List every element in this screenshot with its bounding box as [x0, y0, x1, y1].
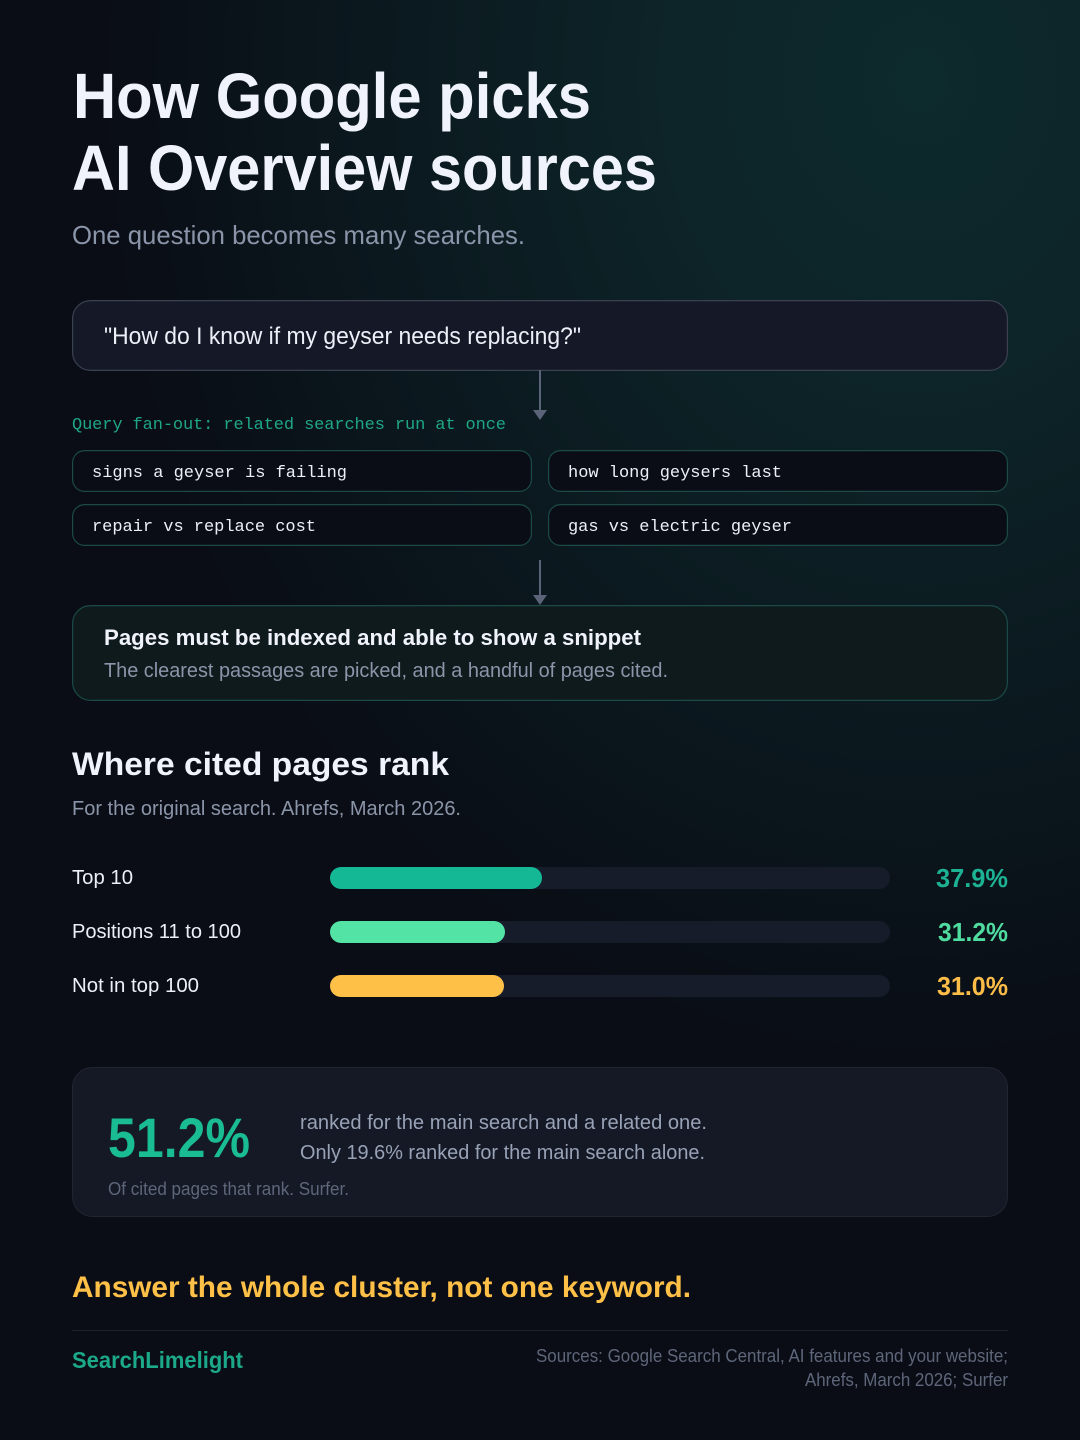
bar: positions 11 to 100: Positions 11 to 100: [72, 921, 241, 943]
stat source note: Of cited pages that rank. Surfer.: [108, 1179, 349, 1199]
panel: indexing requirement: The clearest passages are picked, and a handful of pages cited.: [104, 660, 668, 682]
section note: For the original search. Ahrefs, March 2026.: [72, 798, 461, 820]
chip: signs a geyser is failing: signs a geyser is failing: [92, 464, 347, 483]
arrow: question to fan-out: [533, 370, 547, 420]
chip: how long geysers last: [549, 451, 1007, 491]
bar: not in top 100: Not in top 100: [72, 975, 199, 997]
panel: fan-out queries: [73, 451, 1007, 545]
bar: positions 11 to 100: 31.2%: [938, 917, 1008, 947]
bar: top 10: Top 10: [72, 867, 133, 889]
bar chart: [72, 863, 1008, 1001]
sources: Sources: Google Search Central, AI features and your website;: [536, 1346, 1008, 1366]
subtitle: One question becomes many searches.: [72, 220, 525, 250]
brand: SearchLimelight: [72, 1347, 243, 1373]
sources: Ahrefs, March 2026; Surfer: [805, 1370, 1008, 1390]
bar: top 10: 37.9%: [936, 863, 1008, 893]
bar: positions 11 to 100: [72, 917, 1008, 947]
big number: 51.2%: [108, 1106, 250, 1169]
title: AI Overview sources: [72, 132, 657, 204]
title: How Google picks: [73, 60, 591, 132]
bar: not in top 100: 31.0%: [937, 971, 1008, 1001]
chip: repair vs replace cost: repair vs replace cost: [92, 518, 316, 537]
chip: repair vs replace cost: [73, 505, 531, 545]
stat explanation: ranked for the main search and a related one.: [300, 1112, 707, 1134]
stat explanation: [300, 1112, 707, 1164]
chip: gas vs electric geyser: [549, 505, 1007, 545]
bar: not in top 100: [72, 971, 1008, 1001]
arrow: fan-out to result: [533, 560, 547, 605]
fan-out label: Query fan-out: related searches run at once: [72, 416, 506, 435]
chip: gas vs electric geyser: gas vs electric geyser: [568, 518, 792, 537]
takeaway: Answer the whole cluster, not one keyword.: [72, 1271, 691, 1304]
bar: top 10: [72, 863, 1008, 893]
panel: user question: "How do I know if my geyser needs replacing?": [104, 323, 581, 350]
panel: user question: [73, 301, 1007, 370]
chip: how long geysers last: how long geysers last: [568, 464, 782, 483]
title: [72, 60, 657, 204]
chip: signs a geyser is failing: [73, 451, 531, 491]
heading: where cited pages rank: Where cited pages rank: [72, 746, 449, 782]
panel: indexing requirement: Pages must be indexed and able to show a snippet: [104, 625, 642, 650]
stat explanation: Only 19.6% ranked for the main search alone.: [300, 1142, 705, 1164]
panel: key stat: [72, 1068, 1008, 1216]
panel: indexing requirement: [73, 606, 1007, 700]
sources: [536, 1346, 1008, 1390]
